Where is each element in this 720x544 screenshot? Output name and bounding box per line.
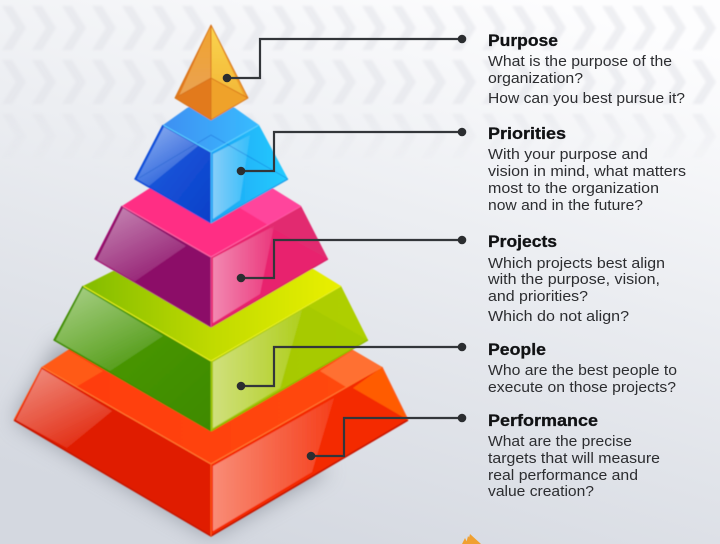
text block: performance bbox=[488, 411, 660, 500]
text block: performance: value creation? bbox=[488, 483, 594, 500]
text block: performance: What are the precise bbox=[488, 433, 632, 450]
text block: purpose: Purpose bbox=[488, 31, 558, 50]
text block: priorities: With your purpose and bbox=[488, 146, 648, 163]
pyramid bbox=[14, 25, 408, 536]
layer: projects (pink) bbox=[95, 155, 328, 327]
connector: people bbox=[237, 343, 466, 390]
text block: performance: real performance and bbox=[488, 467, 638, 484]
connector: projects bbox=[237, 236, 466, 282]
text block: people: execute on those projects? bbox=[488, 379, 676, 396]
text block: priorities: vision in mind, what matters bbox=[488, 163, 686, 180]
text block: projects: Projects bbox=[488, 232, 557, 251]
pyramid drop shadow bbox=[14, 340, 330, 536]
connector: priorities bbox=[237, 128, 466, 175]
layer: priorities (blue) bbox=[135, 96, 288, 223]
text block: priorities: Priorities bbox=[488, 124, 566, 143]
layer: people (green) bbox=[54, 210, 368, 431]
text block: people: People bbox=[488, 340, 546, 359]
text block: purpose: What is the purpose of the bbox=[488, 53, 672, 70]
text block: priorities bbox=[488, 124, 686, 214]
connector: purpose bbox=[223, 35, 466, 82]
text block: projects: Which do not align? bbox=[488, 308, 629, 325]
text block: performance: targets that will measure bbox=[488, 450, 660, 467]
text block: priorities: most to the organization bbox=[488, 180, 659, 197]
text block: purpose: How can you best pursue it? bbox=[488, 90, 685, 107]
text block: purpose: organization? bbox=[488, 70, 583, 87]
text block: projects: Which projects best align bbox=[488, 255, 665, 272]
text block: people: Who are the best people to bbox=[488, 362, 677, 379]
connector: performance bbox=[307, 414, 466, 460]
layer: performance (red) bbox=[14, 270, 408, 536]
icon: cropped orange logo bbox=[462, 534, 481, 544]
text block: performance: Performance bbox=[488, 411, 598, 430]
text block: people bbox=[488, 340, 677, 396]
text block: projects: and priorities? bbox=[488, 288, 588, 305]
text block: purpose bbox=[488, 31, 685, 107]
text block: priorities: now and in the future? bbox=[488, 197, 643, 214]
layer: purpose (orange) bbox=[175, 25, 248, 120]
text block: projects bbox=[487, 232, 665, 325]
text block: projects: with the purpose, vision, bbox=[487, 271, 660, 288]
